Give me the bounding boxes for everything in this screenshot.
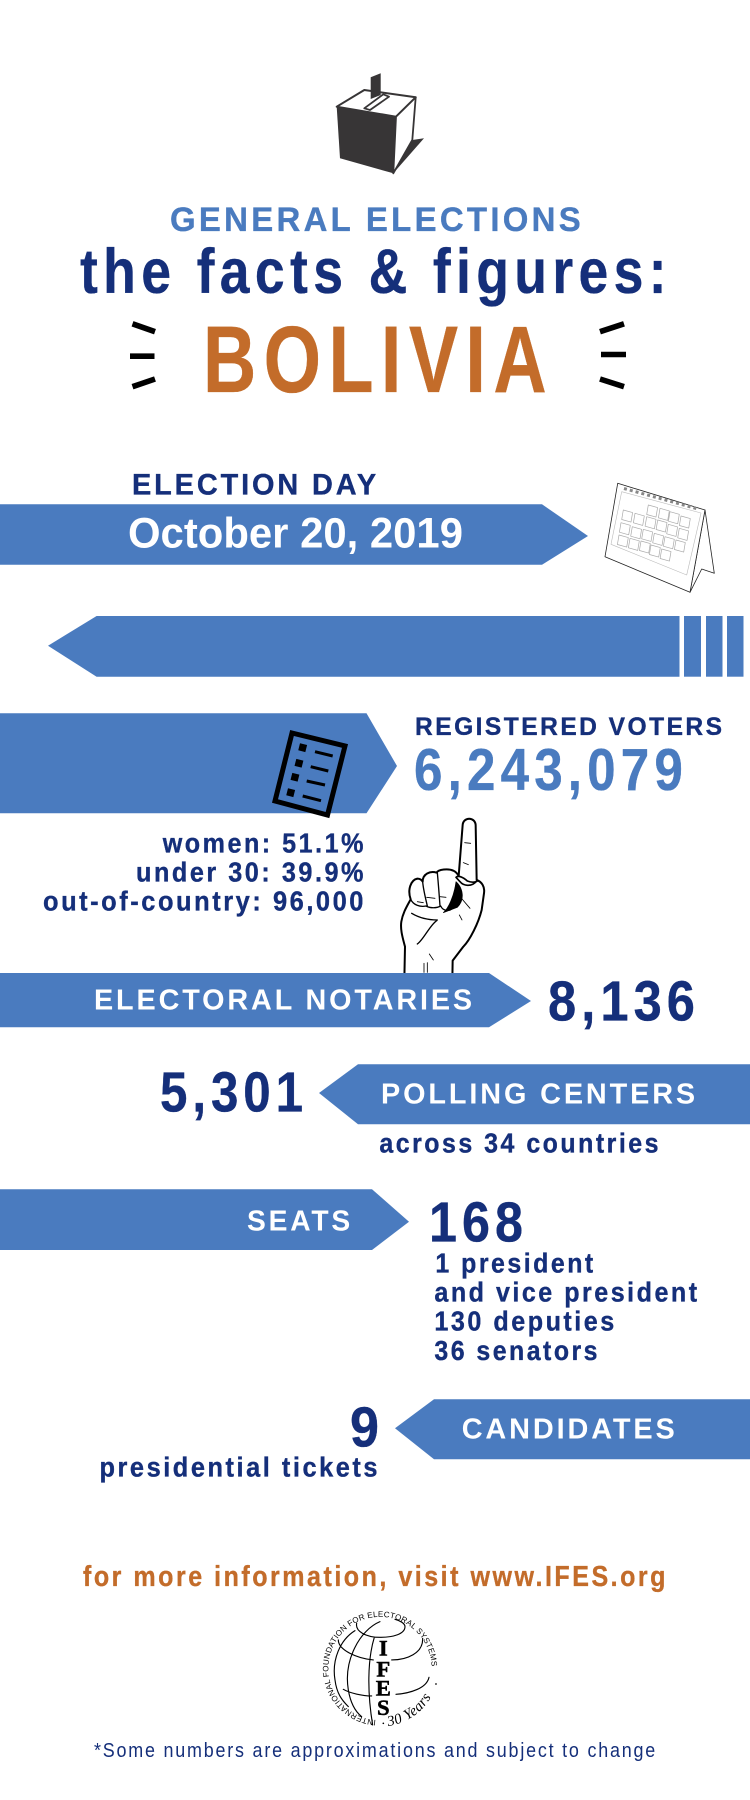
number: registered voters total: 6,243,079 [414, 737, 688, 803]
icon: hand pointing up [401, 819, 484, 980]
arrow banner: polling centers [319, 1064, 750, 1124]
logo: IFES globe: INTERNATIONAL FOUNDATION FOR ELECTORAL SYSTEMS [322, 1611, 438, 1726]
icon: left emphasis ticks [130, 324, 155, 387]
label: electoral notaries: ELECTORAL NOTARIES [94, 984, 475, 1016]
text block: voter breakdown: under 30: 39.9% [136, 857, 366, 888]
number: candidates: 9 [350, 1396, 379, 1460]
arrow banner: election date [0, 504, 588, 565]
subtitle: general elections: GENERAL ELECTIONS [170, 201, 584, 239]
arrow banner: pencil shape with stripes [48, 616, 744, 677]
logo: IFES globe: F [376, 1657, 390, 1682]
heading: Bolivia: BOLIVIA [203, 307, 554, 413]
logo: IFES globe: E [376, 1676, 391, 1701]
text block: seat breakdown: 36 senators [434, 1335, 600, 1366]
text block: seat breakdown [434, 1247, 700, 1366]
logo: IFES globe: 30 Years [388, 1694, 430, 1726]
text block: voter breakdown [43, 828, 366, 917]
number: electoral notaries: 8,136 [548, 970, 700, 1034]
text: presidential tickets: presidential tickets [100, 1452, 380, 1483]
icon: ballot box [337, 73, 424, 173]
number: polling centers: 5,301 [160, 1061, 308, 1125]
text block: seat breakdown: 1 president [435, 1247, 596, 1278]
arrow banner: seats [0, 1189, 409, 1250]
logo: IFES globe: I [379, 1635, 388, 1660]
label: seats: SEATS [247, 1206, 353, 1238]
text: across 34 countries: across 34 countries [379, 1127, 661, 1158]
text block: voter breakdown: women: 51.1% [162, 828, 366, 859]
text: more information link: for more information, visit www.IFES.org [83, 1561, 668, 1593]
number: seats: 168 [429, 1191, 528, 1255]
icon: desk calendar [605, 483, 714, 592]
text block: seat breakdown: and vice president [434, 1277, 700, 1308]
icon: right emphasis ticks [600, 324, 626, 387]
logo: IFES globe: S [377, 1695, 390, 1720]
footnote: *Some numbers are approximations and subject to change [94, 1740, 657, 1762]
icon: voter list document [275, 733, 345, 815]
label: registered voters: REGISTERED VOTERS [415, 713, 724, 741]
text block: seat breakdown: 130 deputies [434, 1306, 617, 1337]
arrow banner: registered voters [0, 713, 397, 813]
label: election day: ELECTION DAY [132, 468, 379, 502]
arrow banner: electoral notaries [0, 973, 531, 1027]
date: October 20, 2019: October 20, 2019 [128, 510, 463, 558]
label: polling centers: POLLING CENTERS [381, 1078, 698, 1110]
label: candidates: CANDIDATES [462, 1413, 678, 1445]
arrow banner: candidates [395, 1399, 750, 1459]
text block: voter breakdown: out-of-country: 96,000 [43, 886, 366, 917]
